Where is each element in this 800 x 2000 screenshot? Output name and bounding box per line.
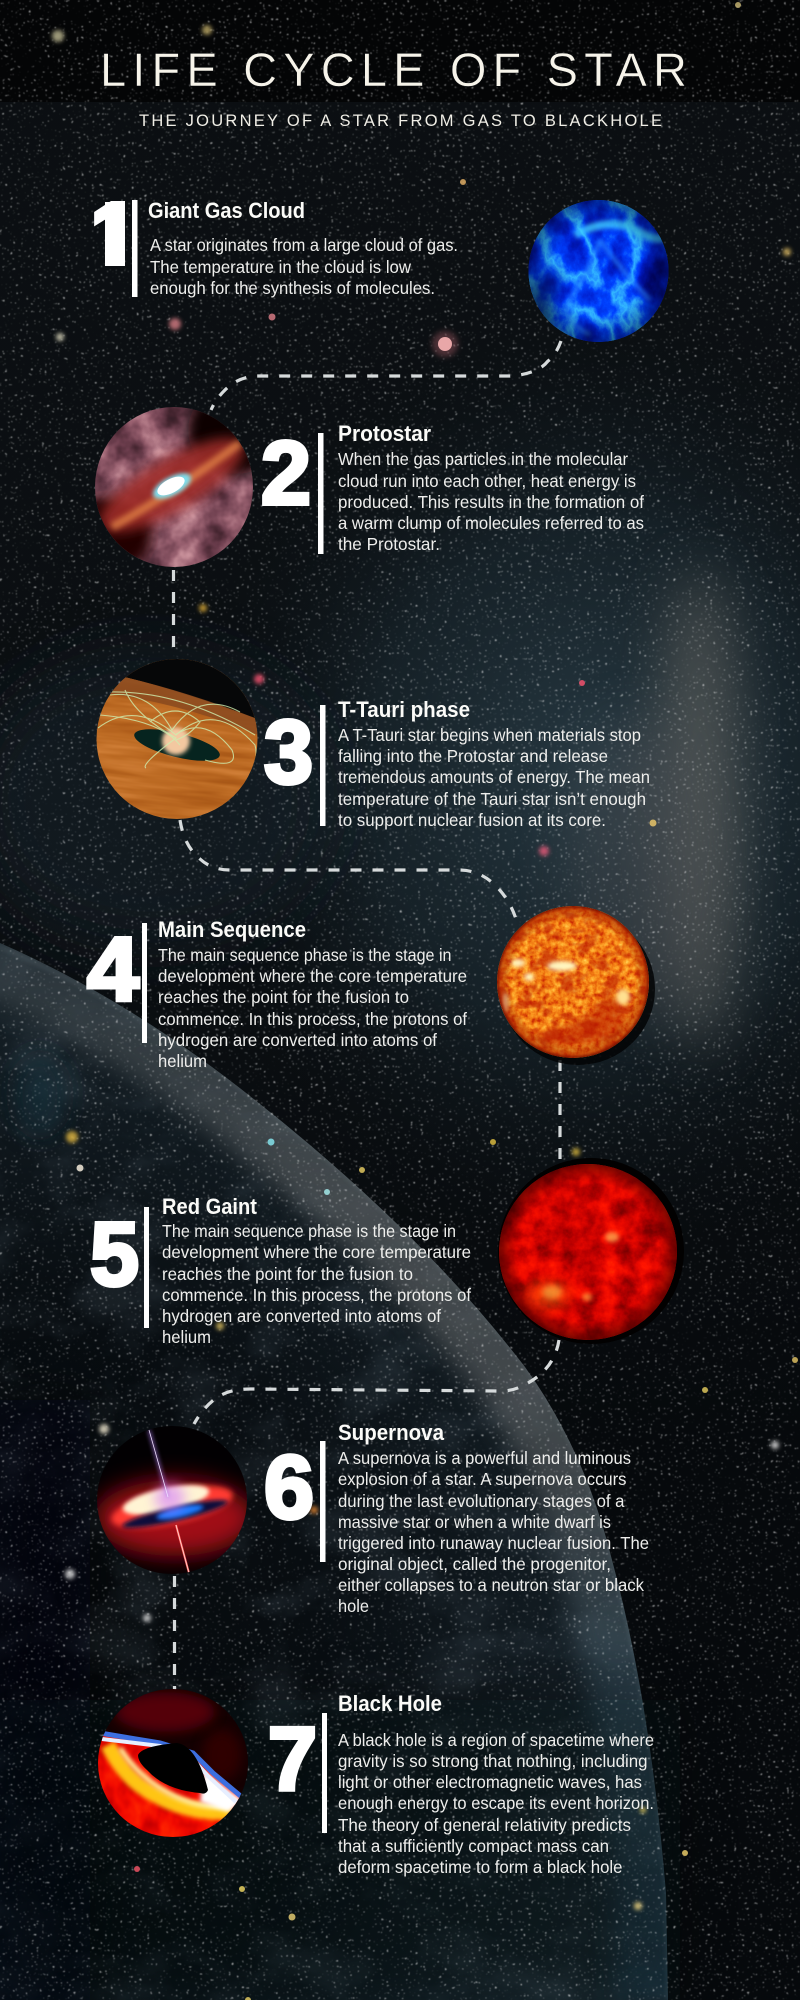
text block: explosion of a star. A supernova occurs: [338, 1469, 627, 1489]
text block: A black hole is a region of spacetime where: [338, 1730, 654, 1750]
number 2: 2: [261, 424, 311, 524]
text block: commence. In this process, the protons of: [158, 1009, 467, 1029]
divider bar 4: [142, 923, 147, 1043]
text block: during the last evolutionary stages of a: [338, 1491, 625, 1511]
text block: to support nuclear fusion at its core.: [338, 810, 606, 830]
text block: The temperature in the cloud is low: [150, 257, 411, 277]
number 5: 5: [90, 1205, 139, 1305]
text block: [338, 725, 650, 830]
heading: Supernova: [338, 1420, 445, 1445]
image: protostar disc: [95, 407, 253, 567]
text block: reaches the point for the fusion to: [162, 1264, 413, 1284]
text block: A T-Tauri star begins when materials stop: [338, 725, 641, 745]
text block: the Protostar.: [338, 534, 440, 554]
divider bar 7: [322, 1713, 327, 1833]
image: black hole accretion disc: [98, 1689, 248, 1837]
text block: hydrogen are converted into atoms of: [158, 1030, 437, 1050]
text block: tremendous amounts of energy. The mean: [338, 767, 650, 787]
text block: temperature of the Tauri star isn’t enough: [338, 789, 646, 809]
panel: step 2 protostar: [95, 407, 644, 567]
divider bar 6: [320, 1441, 326, 1562]
divider bar 2: [318, 433, 324, 554]
text block: [338, 449, 644, 554]
subtitle: THE JOURNEY OF A STAR FROM GAS TO BLACKHOLE: [139, 112, 662, 130]
text block: When the gas particles in the molecular: [338, 449, 628, 469]
arrow: main sequence to red giant: [558, 1060, 562, 1160]
title: LIFE CYCLE OF STAR: [100, 43, 687, 96]
text block: massive star or when a white dwarf is: [338, 1512, 611, 1532]
text block: The main sequence phase is the stage in: [162, 1221, 456, 1241]
panel: step 3 t-tauri: [96, 659, 649, 830]
arrow: red giant to supernova: [194, 1340, 559, 1424]
panel: step 5 red giant: [90, 1158, 684, 1347]
text block: deform spacetime to form a black hole: [338, 1857, 622, 1877]
text block: enough for the synthesis of molecules.: [150, 278, 435, 298]
number 1: 1: [90, 185, 140, 285]
divider bar 1: [132, 200, 138, 297]
arrow: cloud to protostar: [211, 341, 561, 410]
background: planet limb: [0, 940, 680, 2000]
heading: T-Tauri phase: [338, 697, 470, 722]
text block: The theory of general relativity predicts: [338, 1815, 631, 1835]
text block: development where the core temperature: [158, 966, 467, 986]
text block: [338, 1730, 654, 1877]
background: top title band: [0, 0, 800, 102]
text block: gravity is so strong that nothing, including: [338, 1751, 648, 1771]
number 6: 6: [264, 1438, 314, 1538]
heading: Protostar: [338, 421, 431, 446]
image: red giant star: [495, 1158, 684, 1346]
number 4: 4: [87, 920, 139, 1020]
number 7: 7: [268, 1710, 317, 1810]
text block: [162, 1221, 471, 1347]
text block: helium: [162, 1327, 211, 1347]
arrow: protostar to t-tauri: [172, 570, 175, 656]
text block: hydrogen are converted into atoms of: [162, 1306, 441, 1326]
image: t-tauri disc with field lines: [96, 659, 258, 819]
arrow: t-tauri to main sequence: [180, 820, 518, 926]
text block: development where the core temperature: [162, 1242, 471, 1262]
panel: step 6 supernova: [95, 1420, 649, 1616]
number 1: [94, 201, 125, 266]
heading: Red Gaint: [162, 1194, 258, 1219]
text block: commence. In this process, the protons of: [162, 1285, 471, 1305]
text block: original object, called the progenitor,: [338, 1554, 611, 1574]
heading: Giant Gas Cloud: [148, 198, 305, 223]
heading: Main Sequence: [158, 917, 306, 942]
text block: that a sufficiently compact mass can: [338, 1836, 609, 1856]
text block: falling into the Protostar and release: [338, 746, 608, 766]
panel: step 1 giant gas cloud: [94, 200, 668, 342]
text block: hole: [338, 1596, 369, 1616]
divider bar 5: [144, 1207, 149, 1328]
image: blue gas nebula: [528, 200, 668, 342]
divider bar 3: [320, 705, 326, 826]
number 3: 3: [264, 703, 313, 803]
text block: [158, 945, 467, 1071]
text block: produced. This results in the formation of: [338, 492, 644, 512]
text block: The main sequence phase is the stage in: [158, 945, 452, 965]
text block: a warm clump of molecules referred to as: [338, 513, 644, 533]
arrow: supernova to black hole: [173, 1576, 176, 1690]
text block: light or other electromagnetic waves, has: [338, 1772, 642, 1792]
text block: either collapses to a neutron star or black: [338, 1575, 644, 1595]
image: orange sun: [495, 904, 655, 1065]
text block: A star originates from a large cloud of gas.: [150, 235, 458, 255]
text block: [338, 1448, 649, 1616]
panel: step 4 main sequence: [87, 904, 655, 1071]
heading: Black Hole: [338, 1691, 442, 1716]
text block: cloud run into each other, heat energy is: [338, 471, 636, 491]
text block: [150, 235, 458, 298]
text block: enough energy to escape its event horizon.: [338, 1793, 654, 1813]
panel: step 7 black hole: [90, 1686, 654, 1877]
text block: reaches the point for the fusion to: [158, 987, 409, 1007]
text block: helium: [158, 1051, 207, 1071]
text block: triggered into runaway nuclear fusion. The: [338, 1533, 649, 1553]
text block: A supernova is a powerful and luminous: [338, 1448, 631, 1468]
image: supernova explosion: [95, 1424, 255, 1576]
